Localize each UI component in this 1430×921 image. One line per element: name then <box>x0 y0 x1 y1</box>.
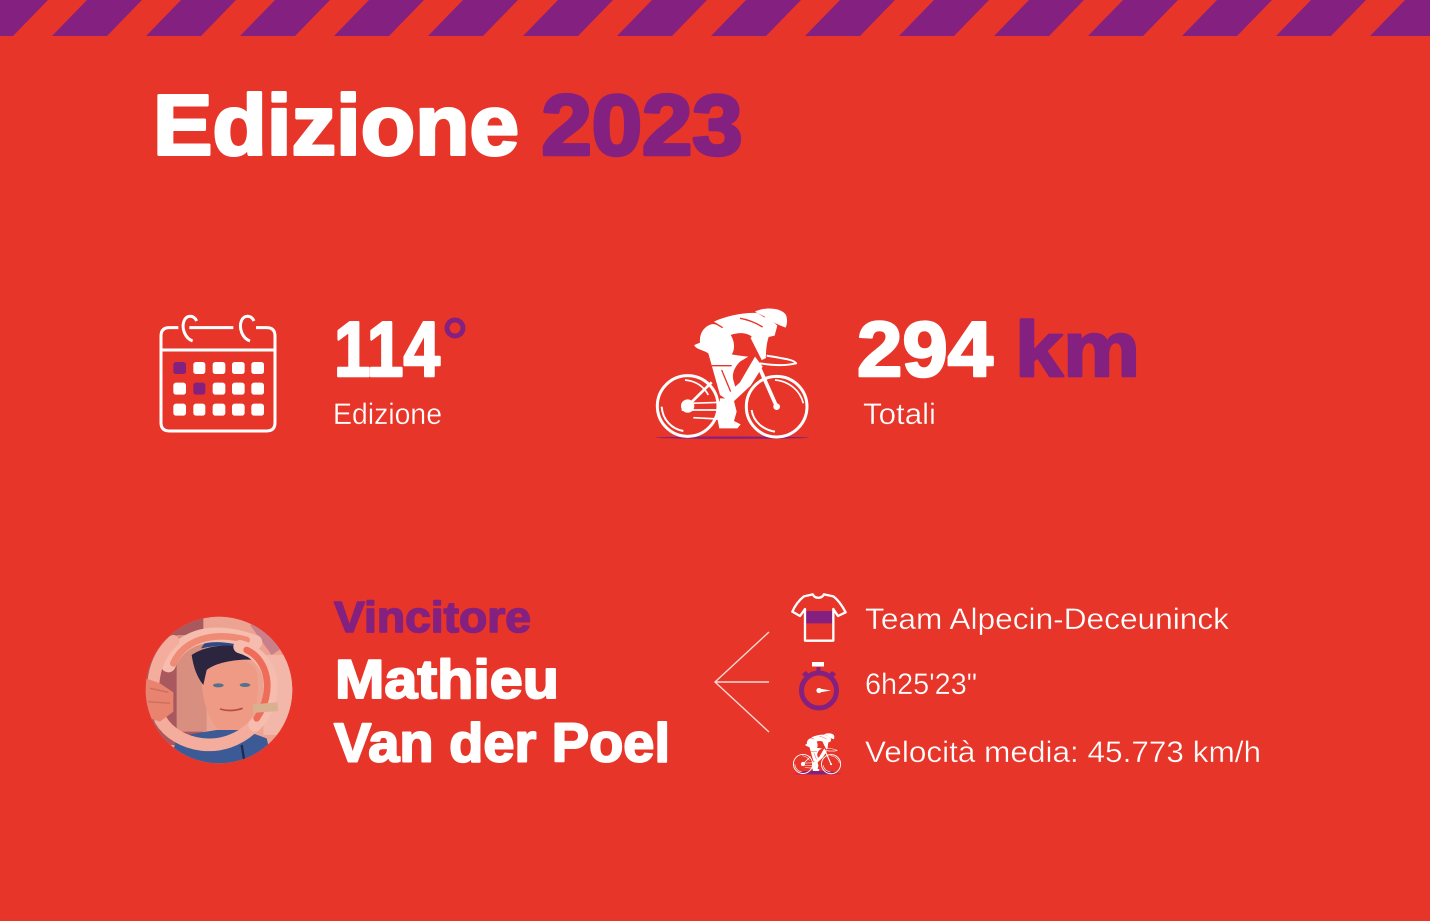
striped top banner <box>0 0 1430 36</box>
title <box>153 78 742 174</box>
icon: small cyclist <box>793 733 841 774</box>
title: Edizione <box>153 78 519 174</box>
panel: distance stat <box>656 305 1140 439</box>
team text: Team Alpecin-Deceuninck <box>865 603 1230 636</box>
panel: edition stat <box>161 305 463 431</box>
winner name <box>334 648 670 774</box>
distance unit: km <box>1015 305 1140 393</box>
title: 2023 <box>542 78 742 174</box>
icon: calendar <box>161 316 275 431</box>
average speed text: Velocità media: 45.773 km/h <box>865 736 1261 769</box>
icon: jersey <box>792 594 846 641</box>
panel: winner <box>140 593 1261 774</box>
edition number: 114 <box>334 305 440 393</box>
winner name: Van der Poel <box>334 712 670 774</box>
winner label: Vincitore <box>334 593 531 642</box>
edition label: Edizione <box>333 398 442 431</box>
icon: stopwatch <box>802 662 836 708</box>
time text: 6h25'23" <box>865 668 977 701</box>
distance value: 294 <box>857 305 993 393</box>
icon: cyclist <box>656 308 809 439</box>
distance label: Totali <box>863 398 936 431</box>
winner photo <box>146 616 292 764</box>
winner name: Mathieu <box>335 648 559 710</box>
degree sign <box>447 320 463 336</box>
connector lines <box>715 632 769 732</box>
